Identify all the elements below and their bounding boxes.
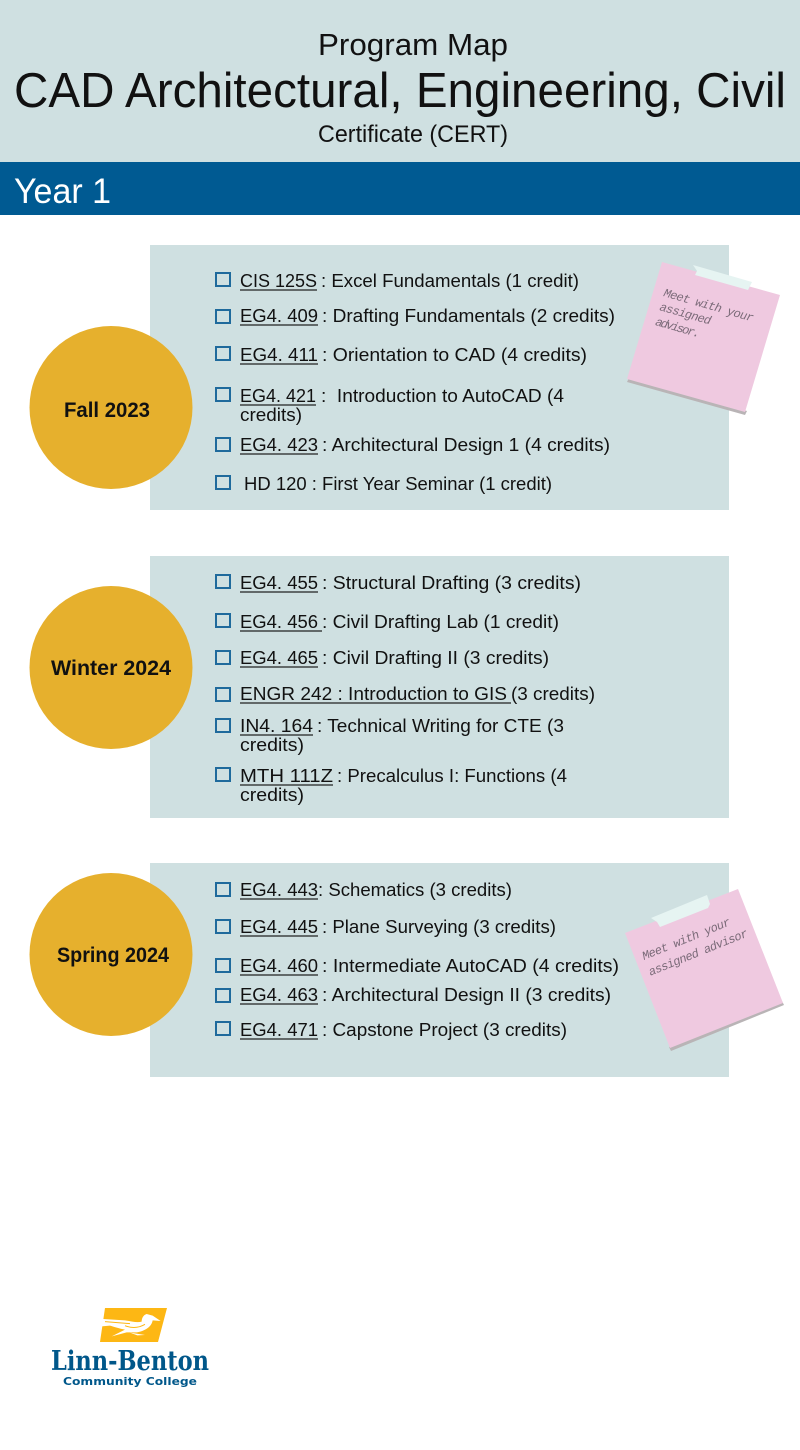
logo: Linn-Benton Community College — [51, 1308, 209, 1388]
course: EG4. 463: EG4. 463 — [240, 984, 318, 1005]
course: EG4. 455 — [216, 572, 581, 593]
course: EG4. 471: : Capstone Project (3 credits) — [322, 1019, 567, 1040]
course: EG4. 460: : Intermediate AutoCAD (4 credits) — [322, 955, 619, 976]
course: CIS 125S: : Excel Fundamentals (1 credit) — [321, 270, 579, 291]
course: EG4. 443 — [216, 879, 512, 900]
sticky note: fall: advisor. — [654, 315, 702, 341]
course: EG4. 409: EG4. 409 — [240, 305, 318, 326]
course: EG4. 465: : Civil Drafting II (3 credits) — [322, 647, 549, 668]
sticky note: spring: assigned advisor — [647, 927, 750, 979]
course: EG4. 445: : Plane Surveying (3 credits) — [322, 916, 556, 937]
course: EG4. 456: EG4. 456 — [240, 611, 318, 632]
logo: Linn-Benton Community College: Community College — [63, 1375, 197, 1388]
course: ENGR 242 — [216, 683, 595, 704]
course: EG4. 456 — [216, 611, 559, 632]
icon: roadrunner badge — [93, 1308, 167, 1342]
course: EG4. 456: : Civil Drafting Lab (1 credit) — [322, 611, 559, 632]
course: EG4. 411: EG4. 411 — [240, 344, 318, 365]
course: EG4. 421 — [216, 385, 564, 425]
course: MTH 111Z: MTH 111Z — [240, 765, 333, 786]
term circle: fall 2023 — [30, 326, 192, 489]
course: EG4. 455: : Structural Drafting (3 credits) — [322, 572, 581, 593]
course: HD 120: HD 120 : First Year Seminar (1 credit) — [244, 473, 552, 494]
year banner: Year 1 — [14, 172, 111, 211]
title: program name: CAD Architectural, Engineering, Civil — [14, 64, 786, 118]
year banner — [0, 162, 800, 215]
course: MTH 111Z: credits) — [240, 784, 304, 805]
course: EG4. 460 — [216, 955, 619, 976]
course: EG4. 421: : Introduction to AutoCAD (4 — [321, 385, 564, 406]
course: EG4. 443: : Schematics (3 credits) — [318, 879, 512, 900]
term circle: winter 2024: Winter 2024 — [51, 657, 171, 680]
course: EG4. 423: : Architectural Design 1 (4 credits) — [322, 434, 610, 455]
course: EG4. 465: EG4. 465 — [240, 647, 318, 668]
course: MTH 111Z — [216, 765, 567, 805]
course: ENGR 242: ENGR 242 : Introduction to GIS — [240, 683, 507, 704]
course: IN4. 164: credits) — [240, 734, 304, 755]
course: EG4. 423: EG4. 423 — [240, 434, 318, 455]
sticky note: fall — [627, 262, 780, 415]
panel: spring 2024 — [30, 863, 729, 1077]
course: EG4. 411: : Orientation to CAD (4 credits) — [322, 344, 587, 365]
course: EG4. 421: credits) — [240, 404, 302, 425]
course: EG4. 443: EG4. 443 — [240, 879, 318, 900]
course: EG4. 421: EG4. 421 — [240, 385, 316, 406]
course: EG4. 445 — [216, 916, 556, 937]
sticky note: spring: Meet with your — [640, 916, 733, 964]
term circle: fall 2023: Fall 2023 — [64, 399, 150, 422]
course: MTH 111Z: : Precalculus I: Functions (4 — [337, 765, 567, 786]
course: CIS 125S: CIS 125S — [240, 270, 317, 291]
header panel — [0, 0, 800, 162]
course: IN4. 164 — [216, 715, 564, 755]
course: EG4. 471: EG4. 471 — [240, 1019, 318, 1040]
course: EG4. 455: EG4. 455 — [240, 572, 318, 593]
term circle: winter 2024 — [30, 586, 192, 749]
course: EG4. 463: : Architectural Design II (3 credits) — [322, 984, 611, 1005]
course: EG4. 411 — [216, 344, 587, 365]
course: EG4. 409: : Drafting Fundamentals (2 credits) — [322, 305, 615, 326]
course: IN4. 164: : Technical Writing for CTE (3 — [317, 715, 564, 736]
sticky note: fall: Meet with your — [662, 286, 755, 325]
subtitle: certificate: Certificate (CERT) — [318, 121, 508, 148]
course: ENGR 242: (3 credits) — [511, 683, 595, 704]
panel: winter 2024 — [30, 556, 729, 818]
term circle: spring 2024: Spring 2024 — [57, 944, 169, 967]
term circle: spring 2024 — [30, 873, 192, 1036]
sticky note: spring — [625, 889, 784, 1051]
sticky note: fall: assigned — [658, 300, 713, 329]
course: EG4. 460: EG4. 460 — [240, 955, 318, 976]
course: IN4. 164: IN4. 164 — [240, 715, 313, 736]
course: EG4. 471 — [216, 1019, 567, 1040]
course: EG4. 445: EG4. 445 — [240, 916, 318, 937]
logo: Linn-Benton Community College: Linn-Benton — [51, 1346, 209, 1377]
title: program map: Program Map — [318, 27, 508, 62]
panel: fall 2023 — [30, 245, 729, 510]
course: EG4. 465 — [216, 647, 549, 668]
